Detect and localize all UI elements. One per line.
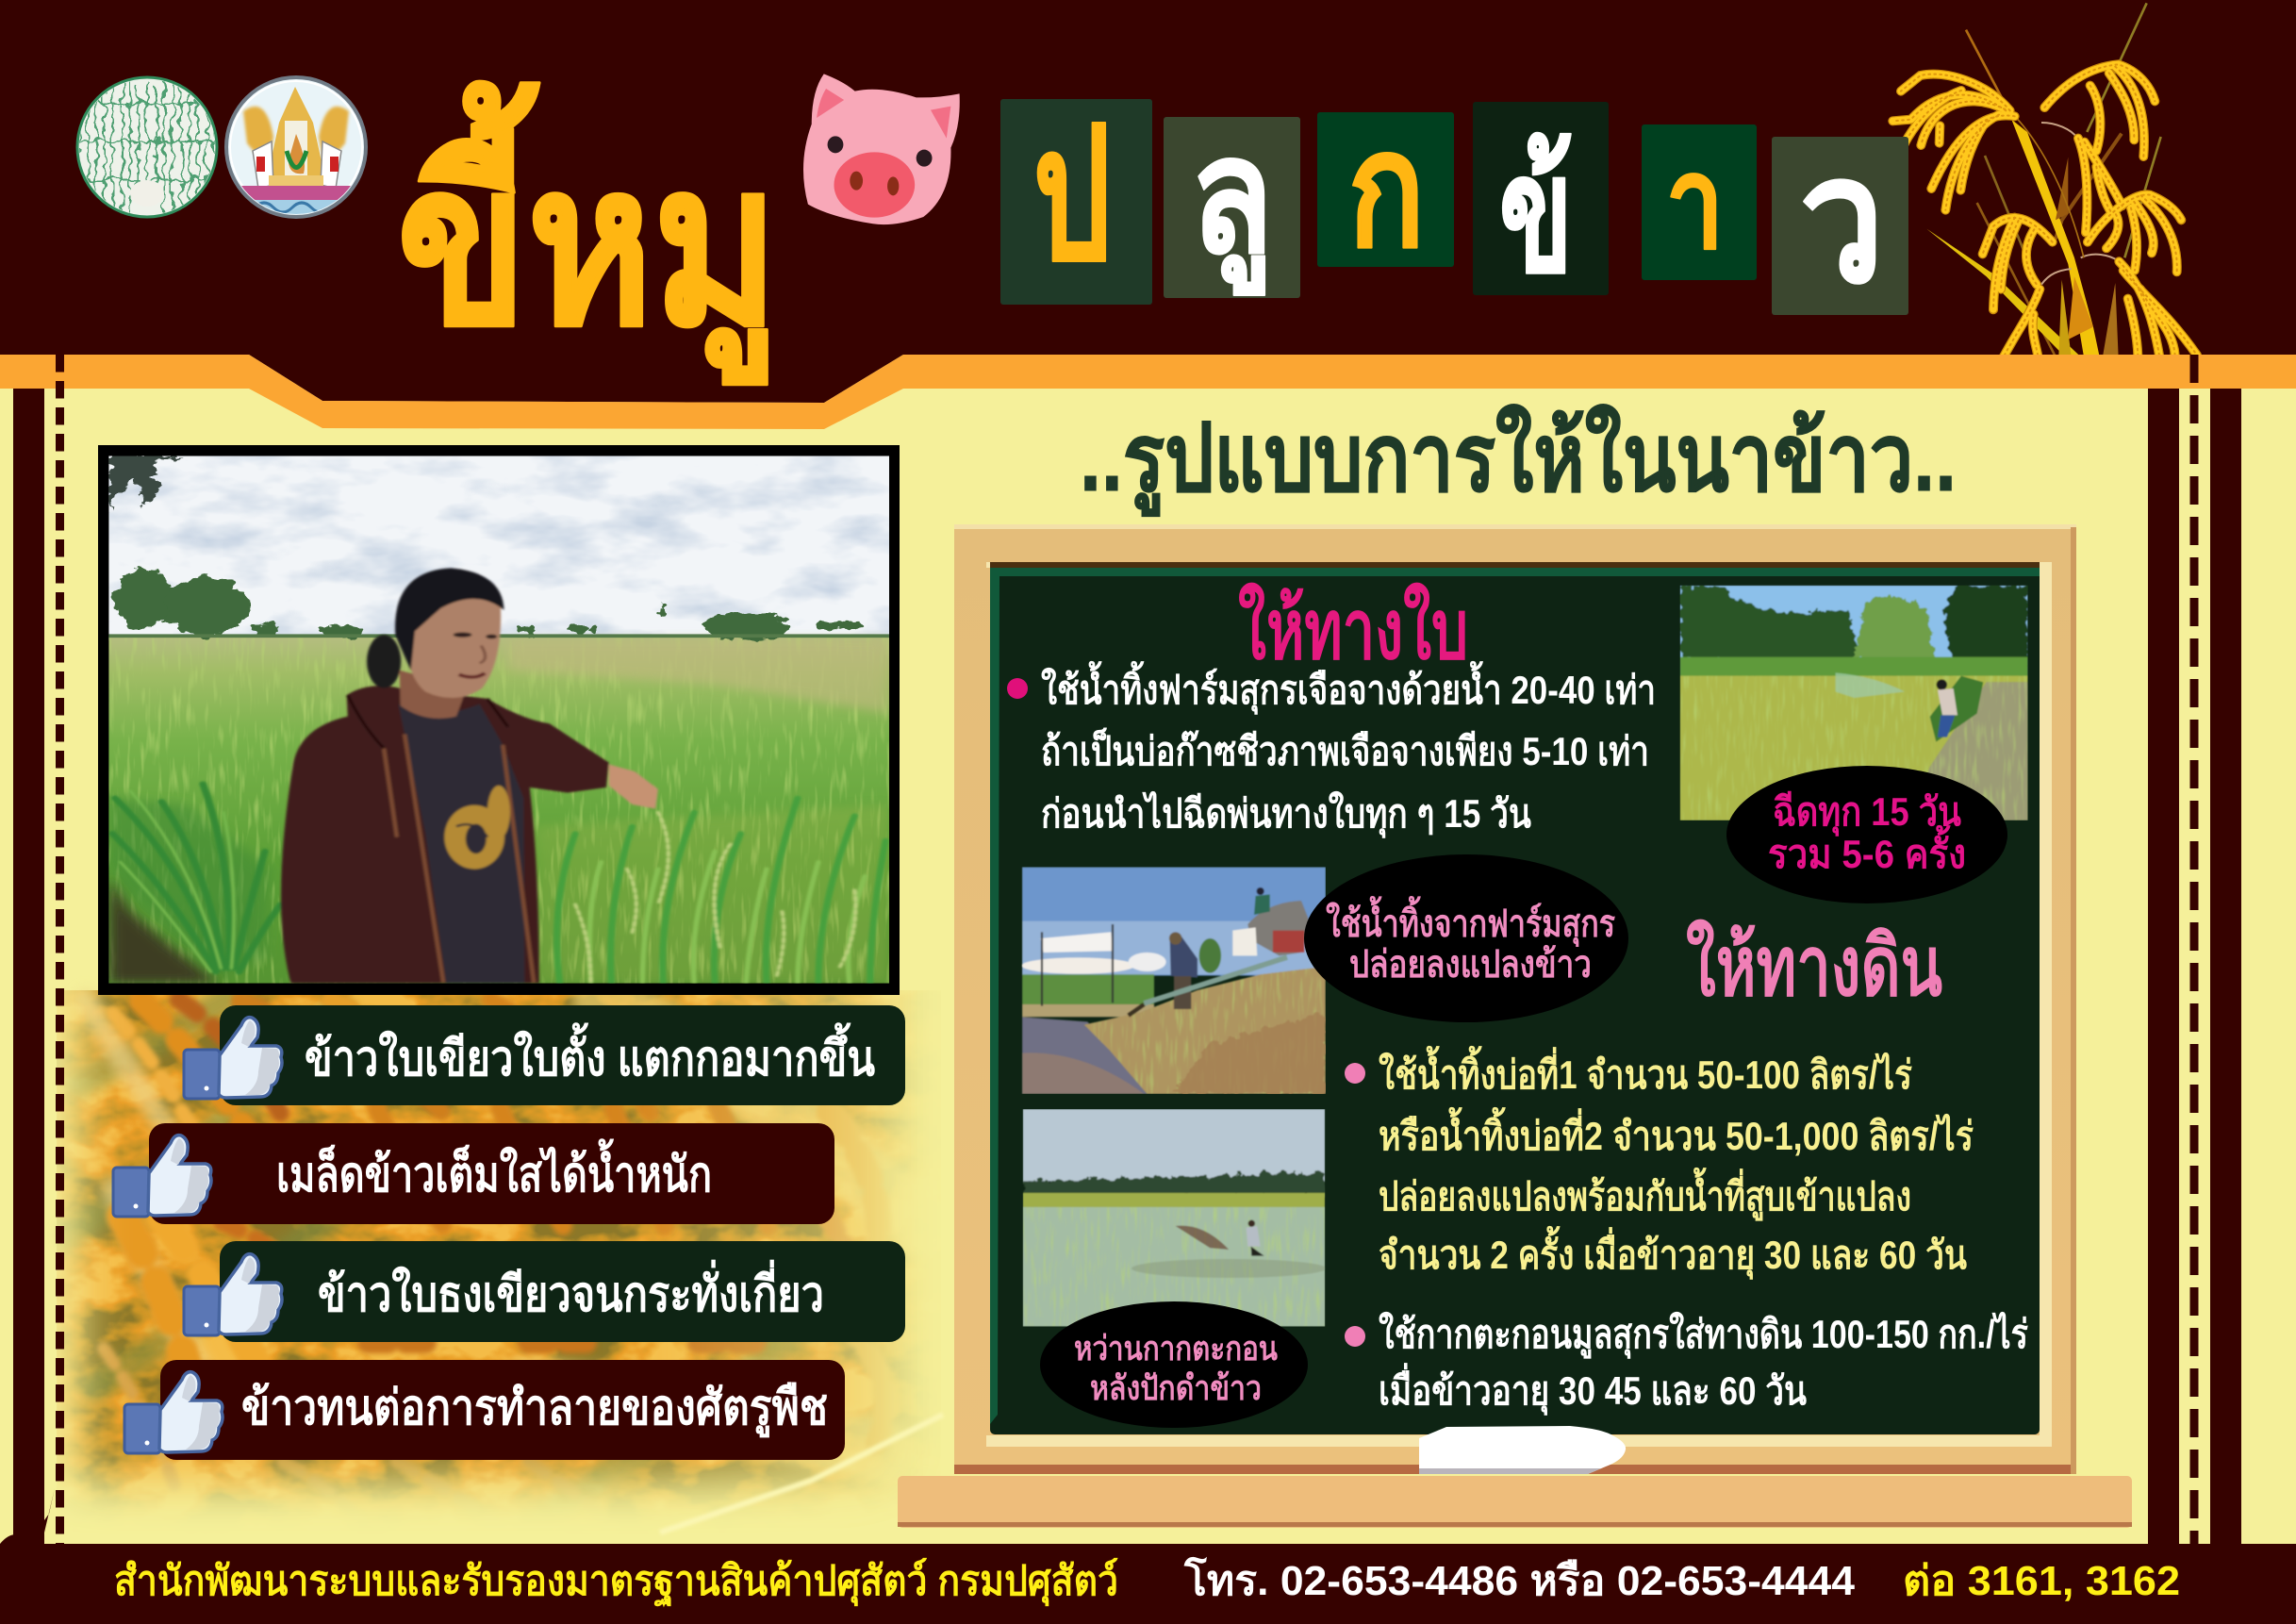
tile: ว: ว [1800,124,1884,318]
woman [281,568,658,984]
ripening rice [534,805,889,984]
benefit list [113,1005,905,1460]
benefit 4 [124,1360,845,1460]
benefit 4: ข้าวทนต่อการทำลายของศัตรูพืช [241,1381,828,1438]
blackboard [990,568,2040,1434]
dry rice band on far field [508,639,889,713]
icon: pig face [803,74,960,224]
sludge text block: เมื่อข้าวอายุ 30 45 และ 60 วัน [1379,1363,1807,1416]
sill [898,1476,2132,1528]
tile: า: า [1666,132,1724,274]
footer: ต่อ 3161, 3162 [1903,1558,2180,1604]
sludge text block: ใช้กากตะกอนมูลสุกรใส่ทางดิน 100-150 กก./ไร่ [1379,1311,2028,1359]
photo: broadcasting sludge [1023,1109,1327,1327]
right stripes [2148,389,2241,1545]
callout: broadcast sludge [1040,1301,1308,1428]
field [108,637,889,984]
tile: ป: ป [1033,92,1111,298]
wooden frame [954,524,2076,1474]
board inner highlight [986,562,2052,1447]
face details [454,633,497,638]
title tiles: ปลูกข้าว [1000,92,1908,318]
orange ribbon [0,355,2296,429]
footer [0,1544,2296,1624]
rice background image [57,990,943,1547]
benefit 3: ข้าวใบธงเขียวจนกระทั่งเกี่ยว [318,1260,824,1322]
person [1247,1220,1264,1256]
benefit 1: ข้าวใบเขียวใบตั้ง แตกกอมากขึ้น [305,1022,875,1086]
callout: spray every 15 days [1726,766,2007,903]
foliar text block [1007,660,1656,838]
callout: broadcast sludge: หลังปักดำข้าว [1090,1368,1262,1407]
chalkboard [898,524,2132,1528]
tile: ลู: ลู [1191,107,1273,295]
sludge text block [1345,1311,2028,1416]
right dashed line [2189,355,2199,1545]
footer: สำนักพัฒนาระบบและรับรองมาตรฐานสินค้าปศุสัตว์ กรมปศุสัตว์ [114,1557,1118,1607]
photo: spraying leaves [1680,586,2028,820]
logo: right seal [226,77,368,221]
pipe [1144,957,1287,1003]
header band [0,0,2296,403]
light straw streak [660,1415,943,1533]
footer: โทร. 02-653-4486 หรือ 02-653-4444 [1183,1555,1856,1604]
shirt ornament [444,786,510,869]
sky [108,456,889,640]
trees on horizon [115,568,865,640]
callout: pig farm wastewater [1304,854,1628,1022]
tile: ลู [1164,107,1300,298]
logo: left seal [77,75,217,219]
callout: spray every 15 days: รวม 5-6 ครั้ง [1768,824,1966,876]
farmer [1937,679,1957,737]
rice plant illustration [1892,3,2197,358]
foliar text block: ก่อนนำไปฉีดพ่นทางใบทุก ๆ 15 วัน [1041,790,1531,838]
tile: ก: ก [1348,101,1425,280]
tree branch [108,456,180,514]
hood seam [348,695,508,749]
foliar text block: ใช้น้ำทิ้งฟาร์มสุกรเจือจางด้วยน้ำ 20-40 เท่า [1041,660,1656,715]
left dashed line [56,355,64,1545]
callout: pig farm wastewater: ใช้น้ำทิ้งจากฟาร์มสุกร [1326,896,1615,948]
foliar text block: ถ้าเป็นบ่อก๊าซชีวภาพเจือจางเพียง 5-10 เท่า [1041,727,1649,773]
section heading: ..รูปแบบการให้ในนาข้าว.. [1080,404,1957,517]
heading: foliar application: ให้ทางใบ [1238,582,1468,676]
soil text block: จำนวน 2 ครั้ง เมื่อข้าวอายุ 30 และ 60 วัน [1379,1225,1967,1280]
corner flourish [0,1488,55,1544]
benefit 2: เมล็ดข้าวเต็มใสได้น้ำหนัก [276,1138,712,1202]
soil text block: หรือน้ำทิ้งบ่อที่2 จำนวน 50-1,000 ลิตร/ไร่ [1379,1106,1974,1158]
soil text block [1345,1045,1974,1280]
people [1169,887,1270,1009]
heading: soil application: ให้ทางดิน [1686,919,1942,1013]
jacket [281,686,609,984]
tile: า [1642,124,1757,280]
chalk [1419,1426,1626,1474]
t-shirt [399,704,524,984]
callout: spray every 15 days: ฉีดทุก 15 วัน [1773,789,1961,837]
left stripe [13,389,44,1545]
tanker [1247,901,1311,955]
soil text block: ปล่อยลงแปลงพร้อมกับน้ำที่สูบเข้าแปลง [1379,1167,1911,1221]
benefit 3 [184,1241,905,1342]
tile: ข้: ข้ [1499,124,1573,306]
callout: pig farm wastewater: ปล่อยลงแปลงข้าว [1349,944,1592,986]
flag [1040,924,1113,1006]
benefit 1 [184,1005,905,1105]
hand [609,764,658,808]
neck and face [400,671,467,719]
hair [395,568,504,671]
callout: broadcast sludge: หว่านกากตะกอน [1074,1329,1278,1367]
soil and dark rice [108,876,219,984]
main photo: woman in the rice field [98,445,900,995]
soil text block: ใช้น้ำทิ้งบ่อที่1 จำนวน 50-100 ลิตร/ไร่ [1379,1045,1912,1097]
photo: pumping wastewater [1021,867,1326,1094]
title: ขี้หมู: ขี้หมู [397,81,779,385]
benefit 2 [113,1123,834,1224]
zipper edges [384,734,534,983]
